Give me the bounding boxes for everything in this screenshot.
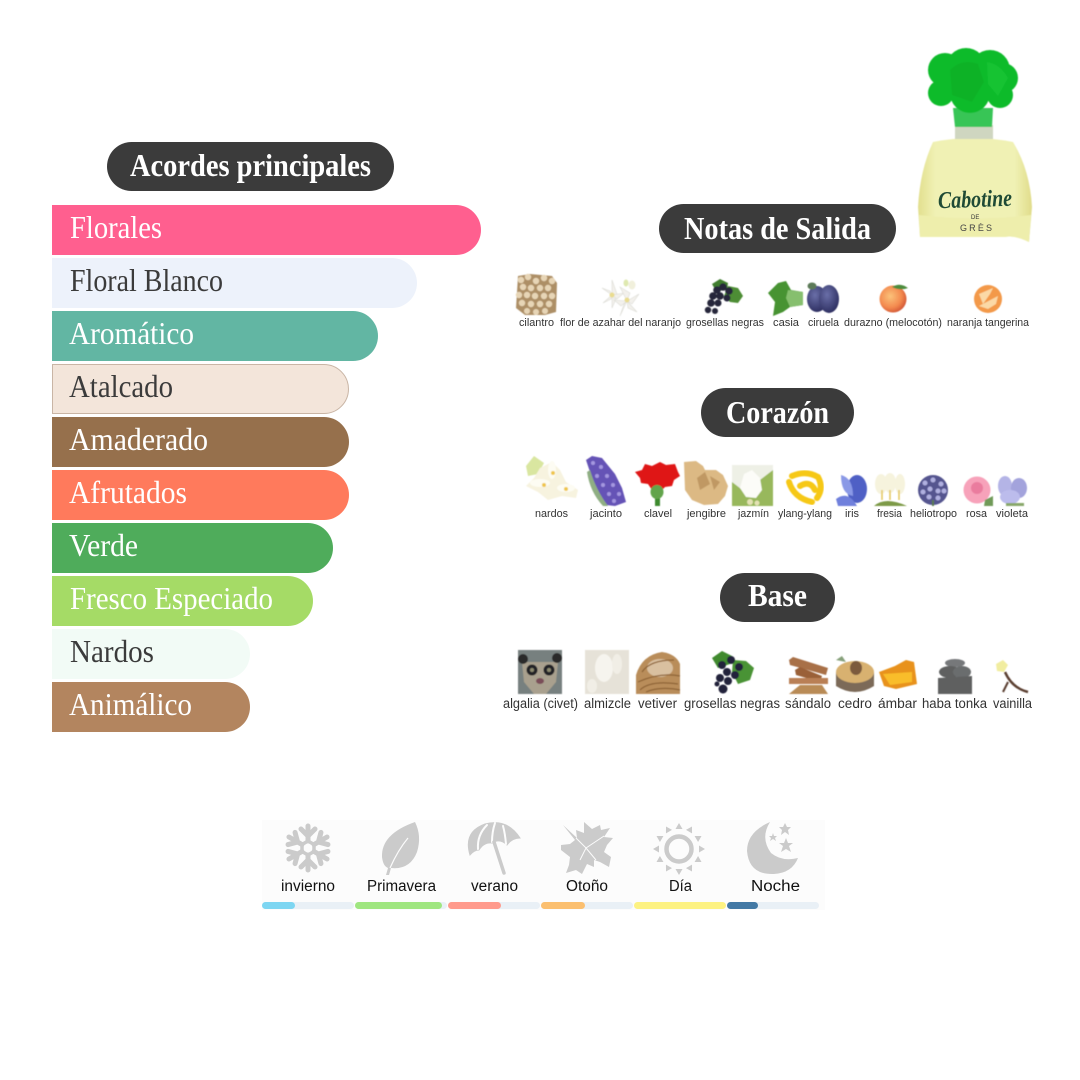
labels: base notes: haba tonka [922, 696, 987, 711]
bar: invierno [262, 902, 354, 909]
panel: estaciones y momento del día [262, 820, 825, 910]
icon: nardos [526, 456, 578, 500]
icon: almizcle [585, 650, 629, 694]
icon: día sun [653, 823, 705, 875]
panel: corazón [526, 388, 1029, 520]
labels: salida notes: cilantro [519, 317, 554, 329]
icon: cilantro [516, 274, 557, 315]
icon: haba tonka [938, 659, 972, 694]
labels: seasons: verano [471, 878, 518, 895]
bar: Floral Blanco [52, 258, 417, 308]
bar: Verde: Verde [69, 527, 138, 563]
labels: salida notes [519, 317, 1030, 329]
labels: salida notes: ciruela [808, 317, 840, 329]
icon: iris [836, 475, 867, 506]
bar: Fresco Especiado: Fresco Especiado [70, 580, 273, 616]
bar: noche [727, 902, 819, 909]
icon: vetiver [636, 652, 680, 694]
icon: violeta [998, 476, 1027, 506]
image: perfume bottle: Cabotine [938, 186, 1013, 214]
heading: notas de salida [659, 204, 896, 253]
panel: notas de salida [516, 204, 1030, 329]
labels: corazón notes: rosa [966, 508, 988, 520]
bar: primavera [355, 902, 447, 909]
heading: corazón: Corazón [726, 394, 829, 430]
bar: Aromático: Aromático [69, 315, 194, 351]
labels: base notes: almizcle [584, 696, 631, 711]
labels: seasons: Noche [751, 878, 800, 895]
labels: corazón notes: jacinto [589, 508, 622, 520]
labels: salida notes: naranja tangerina [947, 317, 1030, 329]
panel: base [503, 573, 1032, 711]
bar: otoño [541, 902, 633, 909]
icon: fresia [874, 473, 907, 506]
bar: Amaderado [52, 417, 349, 467]
icon: durazno [880, 285, 908, 312]
labels: salida notes: durazno (melocotón) [844, 317, 942, 329]
labels: corazón notes: fresia [877, 508, 903, 520]
bar: Aromático [52, 311, 378, 361]
icon: invierno snowflake [285, 826, 331, 870]
icon: heliotropo [918, 475, 948, 506]
bar: Nardos: Nardos [70, 633, 154, 669]
labels: corazón notes: ylang-ylang [778, 508, 832, 520]
bar: Nardos [52, 629, 250, 679]
bar: Animálico: Animálico [69, 686, 192, 722]
bar: Afrutados: Afrutados [69, 474, 187, 510]
bar: Animálico [52, 682, 250, 732]
icon: naranja tangerina [974, 285, 1002, 313]
image: perfume bottle: DE [971, 215, 979, 221]
icon: cedro [836, 656, 874, 692]
labels: corazón notes: iris [845, 508, 859, 520]
image: perfume bottle: GRÈS [960, 223, 992, 233]
labels: corazón notes: clavel [644, 508, 672, 520]
labels: base notes: vainilla [993, 696, 1032, 711]
labels: corazón notes: heliotropo [910, 508, 957, 520]
icon: jazmín [732, 465, 773, 506]
icon: clavel [635, 462, 680, 506]
icon: otoño maple leaf [561, 822, 613, 874]
labels: seasons: Otoño [566, 878, 608, 895]
bar: Amaderado: Amaderado [69, 421, 208, 457]
bar: Verde [52, 523, 333, 573]
labels: salida notes: grosellas negras [686, 317, 764, 329]
icon: ylang-ylang [789, 473, 821, 502]
icon: verano umbrella [468, 823, 520, 873]
labels: base notes: ámbar [878, 696, 918, 711]
labels: base notes: sándalo [785, 696, 831, 711]
icon: algalia (civet) [518, 650, 562, 694]
bar: Afrutados [52, 470, 349, 520]
icon: grosellas negras [705, 279, 743, 314]
bar: Florales: Florales [70, 209, 162, 245]
icon: jacinto [586, 456, 626, 506]
icon: flor de azahar [602, 280, 639, 316]
bar: Atalcado: Atalcado [69, 368, 173, 404]
labels: seasons: invierno [281, 878, 335, 895]
bar: día [634, 902, 726, 909]
labels: corazón notes [535, 508, 1029, 520]
labels: base notes: cedro [838, 696, 872, 711]
bar: Fresco Especiado [52, 576, 313, 626]
labels: corazón notes: violeta [996, 508, 1029, 520]
icon: sándalo [789, 657, 828, 694]
heading: base [720, 573, 835, 622]
bar: Florales [52, 205, 481, 255]
bar: verano [448, 902, 540, 909]
labels: seasons: Día [669, 878, 692, 895]
heading: corazón [701, 388, 854, 437]
bar: Floral Blanco: Floral Blanco [70, 262, 223, 298]
labels: base notes: algalia (civet) [503, 696, 578, 711]
icon: grosellas negras [712, 651, 754, 694]
labels: salida notes: flor de azahar del naranjo [560, 317, 681, 329]
icon: casia leaf [768, 281, 803, 316]
labels: base notes: grosellas negras [684, 696, 780, 711]
bar: Atalcado [52, 364, 348, 414]
labels: seasons: Primavera [367, 878, 436, 895]
panel: acordes principales [52, 142, 481, 732]
icon: vainilla [996, 660, 1028, 692]
icon: primavera leaf [382, 822, 419, 875]
icon: jengibre [684, 461, 728, 505]
image: perfume bottle [918, 48, 1032, 242]
labels: base notes: vetiver [638, 696, 677, 711]
labels: salida notes: casia [773, 317, 800, 329]
labels: corazón notes: jengibre [686, 508, 726, 520]
icon: rosa [964, 476, 993, 506]
icon: ciruela [807, 282, 839, 313]
icon: ámbar [879, 660, 917, 689]
heading: acordes principales: Acordes principales [130, 147, 371, 183]
heading: acordes principales [107, 142, 394, 191]
heading: base: Base [748, 577, 807, 613]
labels: corazón notes: jazmín [737, 508, 769, 520]
labels: seasons [281, 878, 800, 895]
heading: notas de salida: Notas de Salida [684, 210, 871, 246]
icon: noche moon and stars [747, 822, 798, 874]
labels: corazón notes: nardos [535, 508, 568, 520]
labels: base notes [503, 696, 1032, 711]
